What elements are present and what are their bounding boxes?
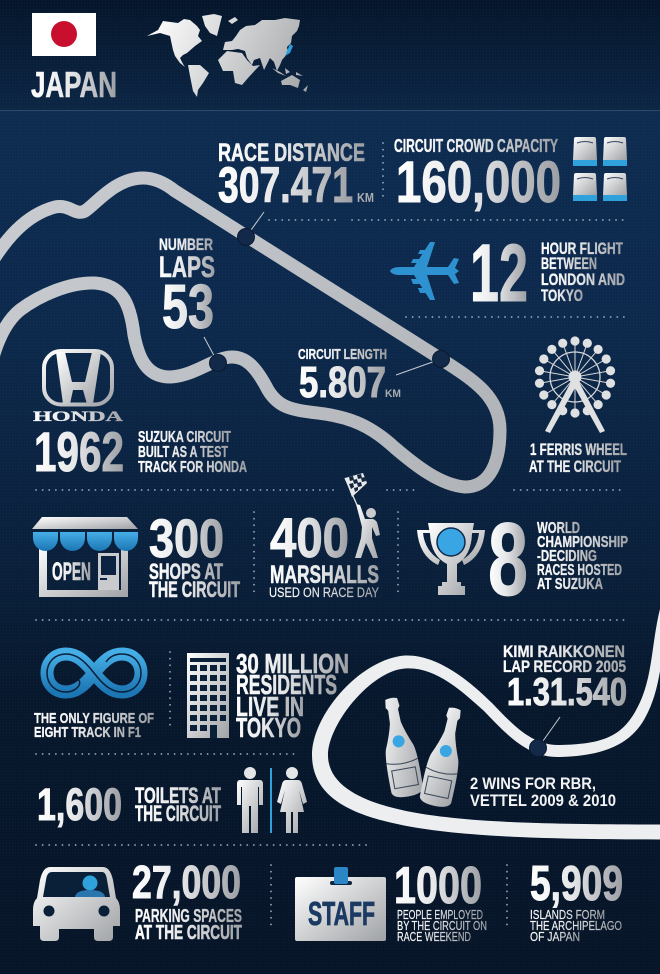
stat: number of laps: LAPS: [159, 251, 215, 284]
stat: race distance: [218, 139, 374, 213]
caption: figure of eight: [34, 710, 154, 741]
heading: Japan: JAPAN: [31, 64, 117, 105]
bottle left: [375, 695, 424, 799]
icon: ferris wheel: [535, 336, 615, 433]
stat: championship-deciding races: WORLD: [537, 520, 580, 537]
stat: championship-deciding races: [488, 502, 628, 618]
icon: airplane: [390, 242, 459, 300]
stat: flight time: [470, 228, 625, 319]
stat: lap record: [503, 642, 627, 714]
stat: toilets: TOILETS AT: [135, 783, 221, 808]
stat: marshalls: [269, 506, 380, 600]
stat: circuit length: 5.807: [299, 358, 386, 407]
world map: [147, 14, 308, 97]
stat: people employed: BY THE CIRCUIT ON: [397, 919, 487, 933]
race track: white circuit: [312, 598, 660, 840]
stat: 1962: SUZUKA CIRCUIT: [138, 429, 231, 446]
stat: Tokyo residents: 30 MILLION: [236, 648, 349, 679]
header band: [0, 0, 660, 110]
stat: shops: SHOPS AT: [149, 559, 223, 584]
caption: ferris wheel: AT THE CIRCUIT: [529, 457, 621, 476]
stat: people employed: PEOPLE EMPLOYED: [397, 908, 483, 922]
stat: 1962: BUILT AS A TEST: [138, 444, 228, 461]
icon: staff badge: STAFF: [308, 895, 375, 932]
caption: figure of eight: THE ONLY FIGURE OF: [34, 710, 154, 727]
stat: toilets: 1,600: [37, 779, 122, 830]
icon: Honda logo: HONDA: [33, 409, 124, 425]
stat: lap record: LAP RECORD 2005: [503, 657, 626, 676]
stat: people employed: 1000: [394, 857, 482, 915]
stat: race distance: 307.471: [218, 157, 353, 213]
stat: championship-deciding races: 8: [488, 502, 528, 618]
caption: ferris wheel: [529, 440, 627, 476]
stat: lap record: KIMI RAIKKONEN: [503, 642, 625, 661]
stat: 1962: [34, 420, 247, 483]
dotted dividers: [36, 143, 625, 930]
icon: trophy: [417, 523, 485, 595]
stat: Tokyo residents: RESIDENTS: [236, 669, 337, 700]
stat: Tokyo residents: TOKYO: [236, 712, 301, 743]
caption: RBR wins: VETTEL 2009 & 2010: [470, 791, 616, 810]
stat: parking spaces: AT THE CIRCUIT: [135, 922, 242, 944]
stat: parking spaces: 27,000: [132, 856, 241, 908]
stat: championship-deciding races: CHAMPIONSHIP: [537, 534, 628, 551]
stat: islands of Japan: 5,909: [530, 857, 623, 911]
icon: shop: OPEN: [52, 558, 91, 586]
caption: RBR wins: 2 WINS FOR RBR,: [470, 774, 596, 793]
stat: parking spaces: [132, 856, 242, 944]
stat: circuit length: CIRCUIT LENGTH: [298, 346, 387, 363]
icon: office building: [187, 653, 229, 738]
stat: Tokyo residents: LIVE IN: [236, 691, 304, 722]
stat: number of laps: 53: [162, 273, 214, 342]
stat: people employed: [394, 857, 487, 944]
icon: Honda logo: [33, 351, 124, 425]
stat: islands of Japan: OF JAPAN: [530, 930, 580, 944]
stat: Tokyo residents: [236, 648, 349, 743]
stat: shops: [149, 509, 240, 602]
stat: crowd capacity: CIRCUIT CROWD CAPACITY: [394, 136, 558, 156]
stat: flight time: BETWEEN: [541, 254, 597, 273]
stat: race distance: RACE DISTANCE: [218, 139, 365, 167]
flag of Japan: [32, 13, 96, 56]
icon: toilet man and woman: [237, 767, 307, 833]
stat: people employed: RACE WEEKEND: [397, 930, 471, 944]
stat: crowd capacity: 160,000: [396, 150, 561, 215]
caption: figure of eight: EIGHT TRACK IN F1: [34, 724, 141, 741]
icon: marshall waving chequered flag: [345, 473, 380, 558]
track marker: race distance: [238, 212, 264, 246]
icon: grandstand seats: [573, 137, 627, 201]
stat: marshalls: USED ON RACE DAY: [269, 584, 380, 600]
stat: shops: 300: [149, 509, 224, 569]
stat: toilets: THE CIRCUIT: [135, 801, 221, 826]
stat: islands of Japan: [530, 857, 623, 944]
icon: car with driver: [33, 867, 120, 941]
stat: islands of Japan: THE ARCHIPELAGO: [530, 919, 622, 933]
track marker: number of laps: [204, 337, 226, 372]
track marker: lap record: [530, 717, 560, 756]
stat: islands of Japan: ISLANDS FORM: [530, 908, 605, 922]
stat: circuit length: KM: [385, 388, 401, 400]
stat: flight time: LONDON AND: [541, 270, 625, 289]
stat: number of laps: [159, 235, 215, 342]
icon: figure of eight: [47, 654, 141, 692]
track marker: circuit length: [396, 350, 450, 375]
stat: championship-deciding races: AT SUZUKA: [537, 576, 603, 593]
stat: flight time: TOKYO: [541, 286, 583, 305]
race track: grey circuit: [0, 178, 500, 487]
stat: crowd capacity: [394, 136, 561, 215]
stat: shops: THE CIRCUIT: [149, 577, 240, 602]
stat: marshalls: 400: [270, 506, 349, 569]
stat: toilets: [37, 779, 221, 830]
stat: lap record: 1.31.540: [507, 671, 627, 714]
icon: shop: [32, 517, 138, 597]
caption: RBR wins: [470, 774, 616, 810]
stat: 1962: 1962: [34, 420, 124, 483]
stat: 1962: TRACK FOR HONDA: [138, 459, 247, 476]
stat: flight time: 12: [470, 228, 528, 319]
stat: marshalls: MARSHALLS: [270, 561, 379, 589]
icon: champagne bottles: [375, 695, 471, 809]
icon: staff badge: [295, 867, 386, 941]
stat: parking spaces: PARKING SPACES: [135, 906, 242, 926]
stat: flight time: HOUR FLIGHT: [541, 239, 623, 258]
stat: championship-deciding races: -DECIDING: [537, 548, 597, 565]
stat: race distance: KM: [357, 191, 374, 205]
stat: number of laps: NUMBER: [159, 235, 213, 254]
